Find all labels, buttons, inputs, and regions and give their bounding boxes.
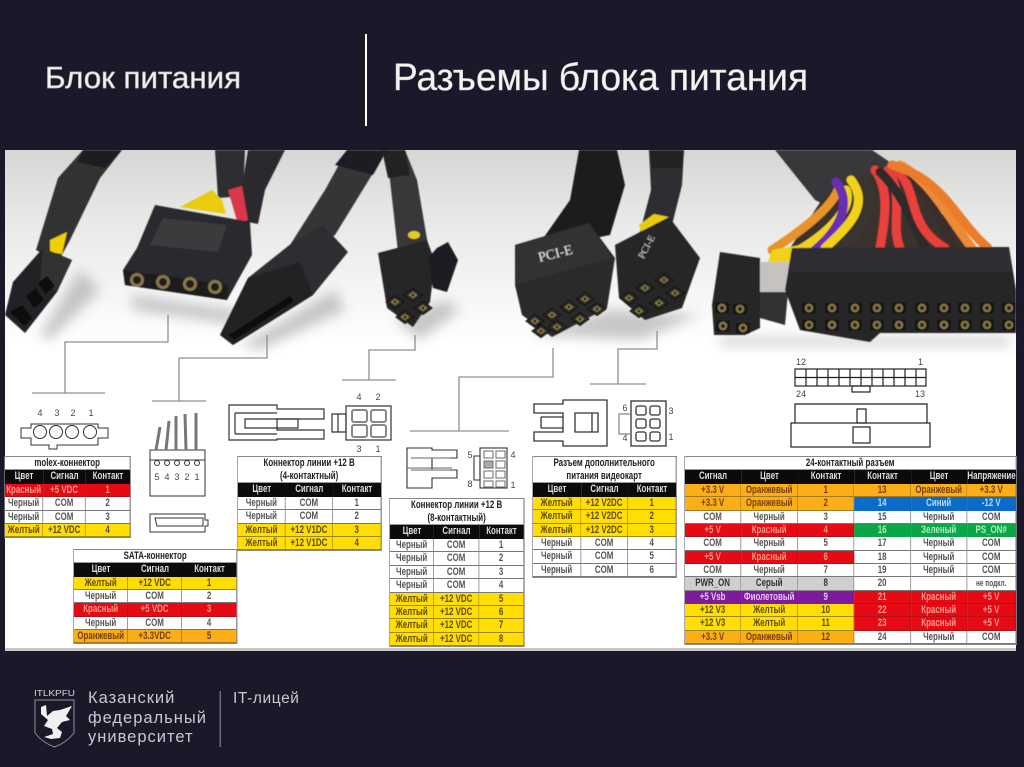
table: molex connector: +12 VDC [48,524,80,536]
table: video card power connector: питания видеокарт [566,470,642,482]
table: 24-pin connector: +5 V [983,604,999,616]
table: 24-pin connector: Черный [754,564,785,576]
table: 24-pin connector: PS_ON# [976,524,1007,536]
table: SATA connector: Красный [83,603,118,615]
table: 8-pin 12V line connector: Коннектор линии +12 В [411,499,502,511]
table: SATA connector: Сигнал [141,563,169,575]
table: 4-pin 12V line connector: Цвет [252,483,271,495]
table: 4-pin 12V line connector: COM [300,497,318,509]
table: 24-pin connector: Черный [923,564,954,576]
footer: university name: Казанский [88,689,175,707]
table: 24-pin connector: Красный [752,524,787,536]
table: video card power connector: 2 [649,510,654,522]
table: video card power connector: 5 [649,550,654,562]
table: video card power connector: Желтый [541,497,573,509]
table: SATA connector: +12 VDC [138,577,171,589]
table: 24-pin connector: Черный [754,537,785,549]
diagram: 8-pin connector: 1 [510,480,516,490]
table: 24-pin connector: 24 [878,631,887,643]
footer: IT lyceum label: IT-лицей [233,690,300,707]
table: SATA connector [74,550,237,643]
table: SATA connector: COM [145,590,164,602]
table: 24-pin connector: +3.3 V [701,497,724,509]
table: 24-pin connector: Серый [756,577,782,589]
leader lines from photo to diagrams [32,315,657,431]
diagram: 24-pin connector: 1 [918,357,923,367]
diagram: 8-pin connector [407,448,516,490]
table: 24-pin connector: +3.3 V [701,631,724,643]
table: 8-pin 12V line connector: Цвет [403,525,421,537]
table: 4-pin 12V line connector: Черный [246,497,277,509]
photo shadows [40,270,1010,350]
table: 24-pin connector: 20 [878,577,887,589]
table: SATA connector: 4 [207,617,211,629]
table: 8-pin 12V line connector: Контакт [486,525,517,537]
diagram: 4-pin connector: 1 [375,444,381,454]
table: 8-pin 12V line connector: Желтый [396,606,428,618]
table: 8-pin 12V line connector: 4 [499,579,503,591]
table: 8-pin 12V line connector: Желтый [396,633,428,645]
diagram: 6-pin video card connector: 3 [668,406,674,416]
table: molex connector: COM [55,497,73,509]
table: 24-pin connector: Сигнал [699,470,727,482]
diagram: SATA connector: 3 [174,472,180,482]
table: 8-pin 12V line connector: COM [447,552,465,564]
table: 8-pin 12V line connector [390,499,524,646]
table: 24-pin connector: COM [703,537,722,549]
table: video card power connector: Цвет [548,483,566,495]
diagram: 6-pin video card connector: 4 [622,433,628,443]
table: SATA connector: 5 [207,630,211,642]
table: SATA connector: Черный [85,590,116,602]
table: 4-pin 12V line connector: Сигнал [295,483,323,495]
table: 4-pin 12V line connector: Контакт [342,483,372,495]
table: 24-pin connector: Оранжевый [746,497,792,509]
table: 24-pin connector: 18 [878,551,887,563]
table: 8-pin 12V line connector: +12 VDC [440,619,472,631]
table: 24-pin connector: 13 [878,484,887,496]
table: 24-pin connector: 15 [878,511,887,523]
table: 24-pin connector: Черный [923,537,954,549]
table: 24-pin connector: Черный [923,551,954,563]
table: video card power connector: 4 [649,537,654,549]
table: 4-pin 12V line connector: Желтый [245,524,277,536]
table: 24-pin connector: Оранжевый [746,484,792,496]
table: molex connector: Черный [8,510,39,522]
table: 8-pin 12V line connector: (8-контактный) [427,512,486,524]
diagram: SATA connector: 2 [184,472,190,482]
icon: PCI-E 6-pin connector photo: PCI-E [636,234,658,261]
diagram: 6-pin video card connector [534,400,674,446]
diagram: 24-pin connector: 12 [796,357,806,367]
icon: 4-pin connector photo [378,150,458,327]
table: SATA connector: Оранжевый [77,630,124,642]
table: SATA connector: Цвет [92,563,110,575]
table: 24-pin connector: 19 [878,564,887,576]
diagram: 4-pin connector [229,392,391,454]
icon: PCI-E 8-pin connector photo: PCI-E [537,243,574,266]
icon: 24-pin ATX connector photo [712,150,1016,342]
table: SATA connector: Контакт [194,563,225,575]
table: 24-pin connector: 10 [821,604,830,616]
table: video card power connector: Контакт [637,483,667,495]
diagram: 8-pin connector: 8 [467,479,473,489]
table: 24-pin connector: Красный [921,604,956,616]
table: video card power connector: 6 [649,564,654,576]
table: 4-pin 12V line connector: Желтый [245,537,277,549]
table: 4-pin 12V line connector: Коннектор линии +12 В [264,457,355,469]
table: 8-pin 12V line connector: 7 [499,619,503,631]
table: 24-pin connector: +12 V3 [700,604,725,616]
diagram: molex connector: 3 [54,408,60,418]
table: video card power connector: +12 V2DC [586,524,623,536]
table: video card power connector: +12 V2DC [586,510,623,522]
table: 24-pin connector: COM [982,551,1000,563]
table: molex connector: COM [55,510,73,522]
table: 8-pin 12V line connector: Желтый [396,619,428,631]
table: 4-pin 12V line connector: 1 [354,497,359,509]
table: 8-pin 12V line connector: 2 [499,552,503,564]
table: 24-pin connector: PWR_ON [695,577,730,589]
diagram: 24-pin connector [791,357,930,447]
table: video card power connector: +12 V2DC [586,497,623,509]
table: 24-pin connector: Фиолетовый [744,591,794,603]
table: video card power connector: COM [595,537,613,549]
table: SATA connector: SATA-коннектор [124,550,187,562]
table: 4-pin 12V line connector: 3 [354,524,359,536]
table: molex connector: Контакт [93,470,123,482]
diagram: SATA connector [150,413,208,532]
table: 24-pin connector: 8 [823,577,828,589]
table: molex connector [5,457,130,537]
header divider [365,34,367,126]
table: 24-pin connector: 22 [878,604,887,616]
table: 4-pin 12V line connector: +12 V1DC [291,537,327,549]
table: molex connector: Черный [8,497,39,509]
table: 24-pin connector: 14 [878,497,887,509]
diagram: 4-pin connector: 2 [375,392,381,402]
table: 24-pin connector: Желтый [753,604,785,616]
table: 8-pin 12V line connector: 8 [499,633,503,645]
table: molex connector: molex-коннектор [34,457,100,469]
table: 24-pin connector: Контакт [867,470,898,482]
table: video card power connector: Черный [541,564,572,576]
table: video card power connector: 1 [649,497,654,509]
table: 24-pin connector: +5 Vsb [700,591,726,603]
table: 4-pin 12V line connector: Черный [246,510,277,522]
table: 8-pin 12V line connector: COM [447,539,465,551]
table: SATA connector: +3.3VDC [138,630,171,642]
table: 8-pin 12V line connector: 1 [499,539,503,551]
table: 24-pin connector: 16 [878,524,887,536]
table: 24-pin connector: 17 [878,537,887,549]
table: 8-pin 12V line connector: Сигнал [442,525,471,537]
table: 24-pin connector: COM [703,511,722,523]
table: molex connector: Желтый [8,524,40,536]
icon: university logo [34,689,75,747]
table: 24-pin connector: Оранжевый [746,631,792,643]
table: molex connector: 3 [105,510,110,522]
table: 24-pin connector: Оранжевый [915,484,962,496]
table: 24-pin connector: Черный [923,511,954,523]
footer: university name: университет [88,728,194,746]
table: 8-pin 12V line connector: +12 VDC [440,592,472,604]
table: SATA connector: 2 [207,590,211,602]
table: 24-pin connector: COM [982,511,1000,523]
table: 24-pin connector: COM [982,564,1000,576]
icon: SATA connector photo [220,150,387,345]
table: video card power connector: 3 [649,524,654,536]
table: 24-pin connector: COM [982,537,1000,549]
diagram: 6-pin video card connector: 6 [622,403,628,413]
table: 24-pin connector: 3 [823,511,828,523]
table: 8-pin 12V line connector: Черный [396,566,427,578]
table: molex connector: 4 [105,524,110,536]
table: 24-pin connector: не подкл. [976,578,1006,588]
table: SATA connector: 1 [207,577,211,589]
table: video card power connector: Желтый [541,510,573,522]
table: 24-pin connector: 21 [878,591,887,603]
icon: PCI-E 8-pin connector photo [515,150,625,338]
table: 24-pin connector: 12 [821,631,830,643]
diagram: molex connector [21,408,108,449]
table: SATA connector: Черный [85,617,116,629]
table: 4-pin 12V line connector: 4 [354,537,359,549]
table: 24-pin connector: Цвет [760,470,779,482]
table: 4-pin 12V line connector: +12 V1DC [291,524,327,536]
table: 24-pin connector: 23 [878,617,887,629]
table: 24-pin connector: Черный [754,511,785,523]
heading: slide title: Разъемы блока питания [393,57,808,99]
table: 8-pin 12V line connector: 3 [499,566,503,578]
table: 24-pin connector: 7 [823,564,828,576]
table: 8-pin 12V line connector: Черный [396,579,427,591]
table: SATA connector: COM [145,617,164,629]
heading: section title: Блок питания [45,60,241,95]
table: 24-pin connector: 5 [823,537,828,549]
footer divider [220,691,221,747]
table: 24-pin connector: +5 V [704,551,721,563]
table: 4-pin 12V line connector: COM [300,510,318,522]
table: 8-pin 12V line connector: +12 VDC [440,606,472,618]
diagram: 4-pin connector: 3 [356,444,362,454]
diagram: 8-pin connector: 5 [467,450,473,460]
table: 24-pin connector: +3.3 V [701,484,724,496]
table: 4-pin 12V line connector [238,457,381,550]
icon: PCI-E 6-pin connector photo [615,150,700,320]
table: 8-pin 12V line connector: Черный [396,552,427,564]
diagram: SATA connector: 5 [154,472,160,482]
table: 8-pin 12V line connector: COM [447,579,465,591]
table: 24-pin connector: Красный [921,591,956,603]
diagram: molex connector: 2 [70,408,76,418]
icon: 8-pin connector photo [5,150,122,333]
table: video card power connector: Черный [541,537,572,549]
table: 24-pin connector: Красный [921,617,956,629]
table: 24-pin connector: Напряжение [967,470,1016,482]
diagram: SATA connector: 4 [164,472,170,482]
table: 24-pin connector: Черный [923,631,954,643]
table: 4-pin 12V line connector: 2 [354,510,359,522]
diagram: 8-pin connector: 4 [510,450,516,460]
table: video card power connector [533,457,676,577]
table: SATA connector: 3 [207,603,211,615]
diagram: SATA connector: 1 [194,472,200,482]
table: video card power connector: Черный [541,550,572,562]
table: 24-pin connector: +3.3 V [980,484,1003,496]
table: video card power connector: Желтый [541,524,573,536]
table: 8-pin 12V line connector: Желтый [396,592,428,604]
table: 24-pin connector: +5 V [983,617,999,629]
table: 24-pin connector: 9 [823,591,828,603]
table: SATA connector: +5 VDC [141,603,169,615]
table: 4-pin 12V line connector: (4-контактный) [280,470,338,482]
diagram: 6-pin video card connector: 1 [668,432,674,442]
table: 24-pin connector: 24-контактный разъем [806,457,894,469]
table: 24-pin connector: Синий [926,497,951,509]
table: 8-pin 12V line connector: +12 VDC [440,633,472,645]
table: 24-pin connector: COM [703,564,722,576]
table: 24-pin connector: Контакт [811,470,841,482]
table: 24-pin connector: 11 [821,617,830,629]
table: 24-pin connector: 4 [823,524,828,536]
table: SATA connector: Желтый [85,577,117,589]
footer: university name: федеральный [88,708,207,726]
diagram: molex connector: 1 [88,408,94,418]
table: molex connector: +5 VDC [50,484,78,496]
table: molex connector: 2 [105,497,110,509]
table: 8-pin 12V line connector: 5 [499,592,503,604]
table: video card power connector: COM [595,564,613,576]
icon: molex connector photo [123,150,285,300]
icon: university logo: ITLKPFU [34,689,75,698]
table: 24-pin connector: Желтый [753,617,785,629]
diagram: 24-pin connector: 24 [796,389,806,399]
table: 24-pin connector: 1 [823,484,828,496]
diagram: molex connector: 4 [37,408,43,418]
table: 24-pin connector: 2 [823,497,828,509]
table: 8-pin 12V line connector: Черный [396,539,427,551]
table: 24-pin connector: COM [982,631,1000,643]
table: 24-pin connector: +5 V [983,591,999,603]
table: molex connector: Цвет [15,470,33,482]
table: 24-pin connector [685,457,1016,644]
footer: university name [88,689,207,746]
diagram: 24-pin connector: 13 [915,389,925,399]
table: molex connector: Красный [6,484,41,496]
table: video card power connector: Разъем дополнительного [553,457,655,469]
table: video card power connector: COM [595,550,613,562]
table: 24-pin connector: +12 V3 [700,617,725,629]
table: 8-pin 12V line connector: COM [447,566,465,578]
table: video card power connector: Сигнал [590,483,619,495]
table: 24-pin connector: Зеленый [921,524,956,536]
table: 24-pin connector: -12 V [982,497,1001,509]
table: molex connector: 1 [105,484,110,496]
table: 8-pin 12V line connector: 6 [499,606,503,618]
table: 24-pin connector: Красный [752,551,787,563]
diagram: 4-pin connector: 4 [356,392,362,402]
table: 24-pin connector: +5 V [704,524,721,536]
table: 24-pin connector: Цвет [930,470,948,482]
table: 24-pin connector: 6 [823,551,828,563]
table: molex connector: Сигнал [50,470,79,482]
